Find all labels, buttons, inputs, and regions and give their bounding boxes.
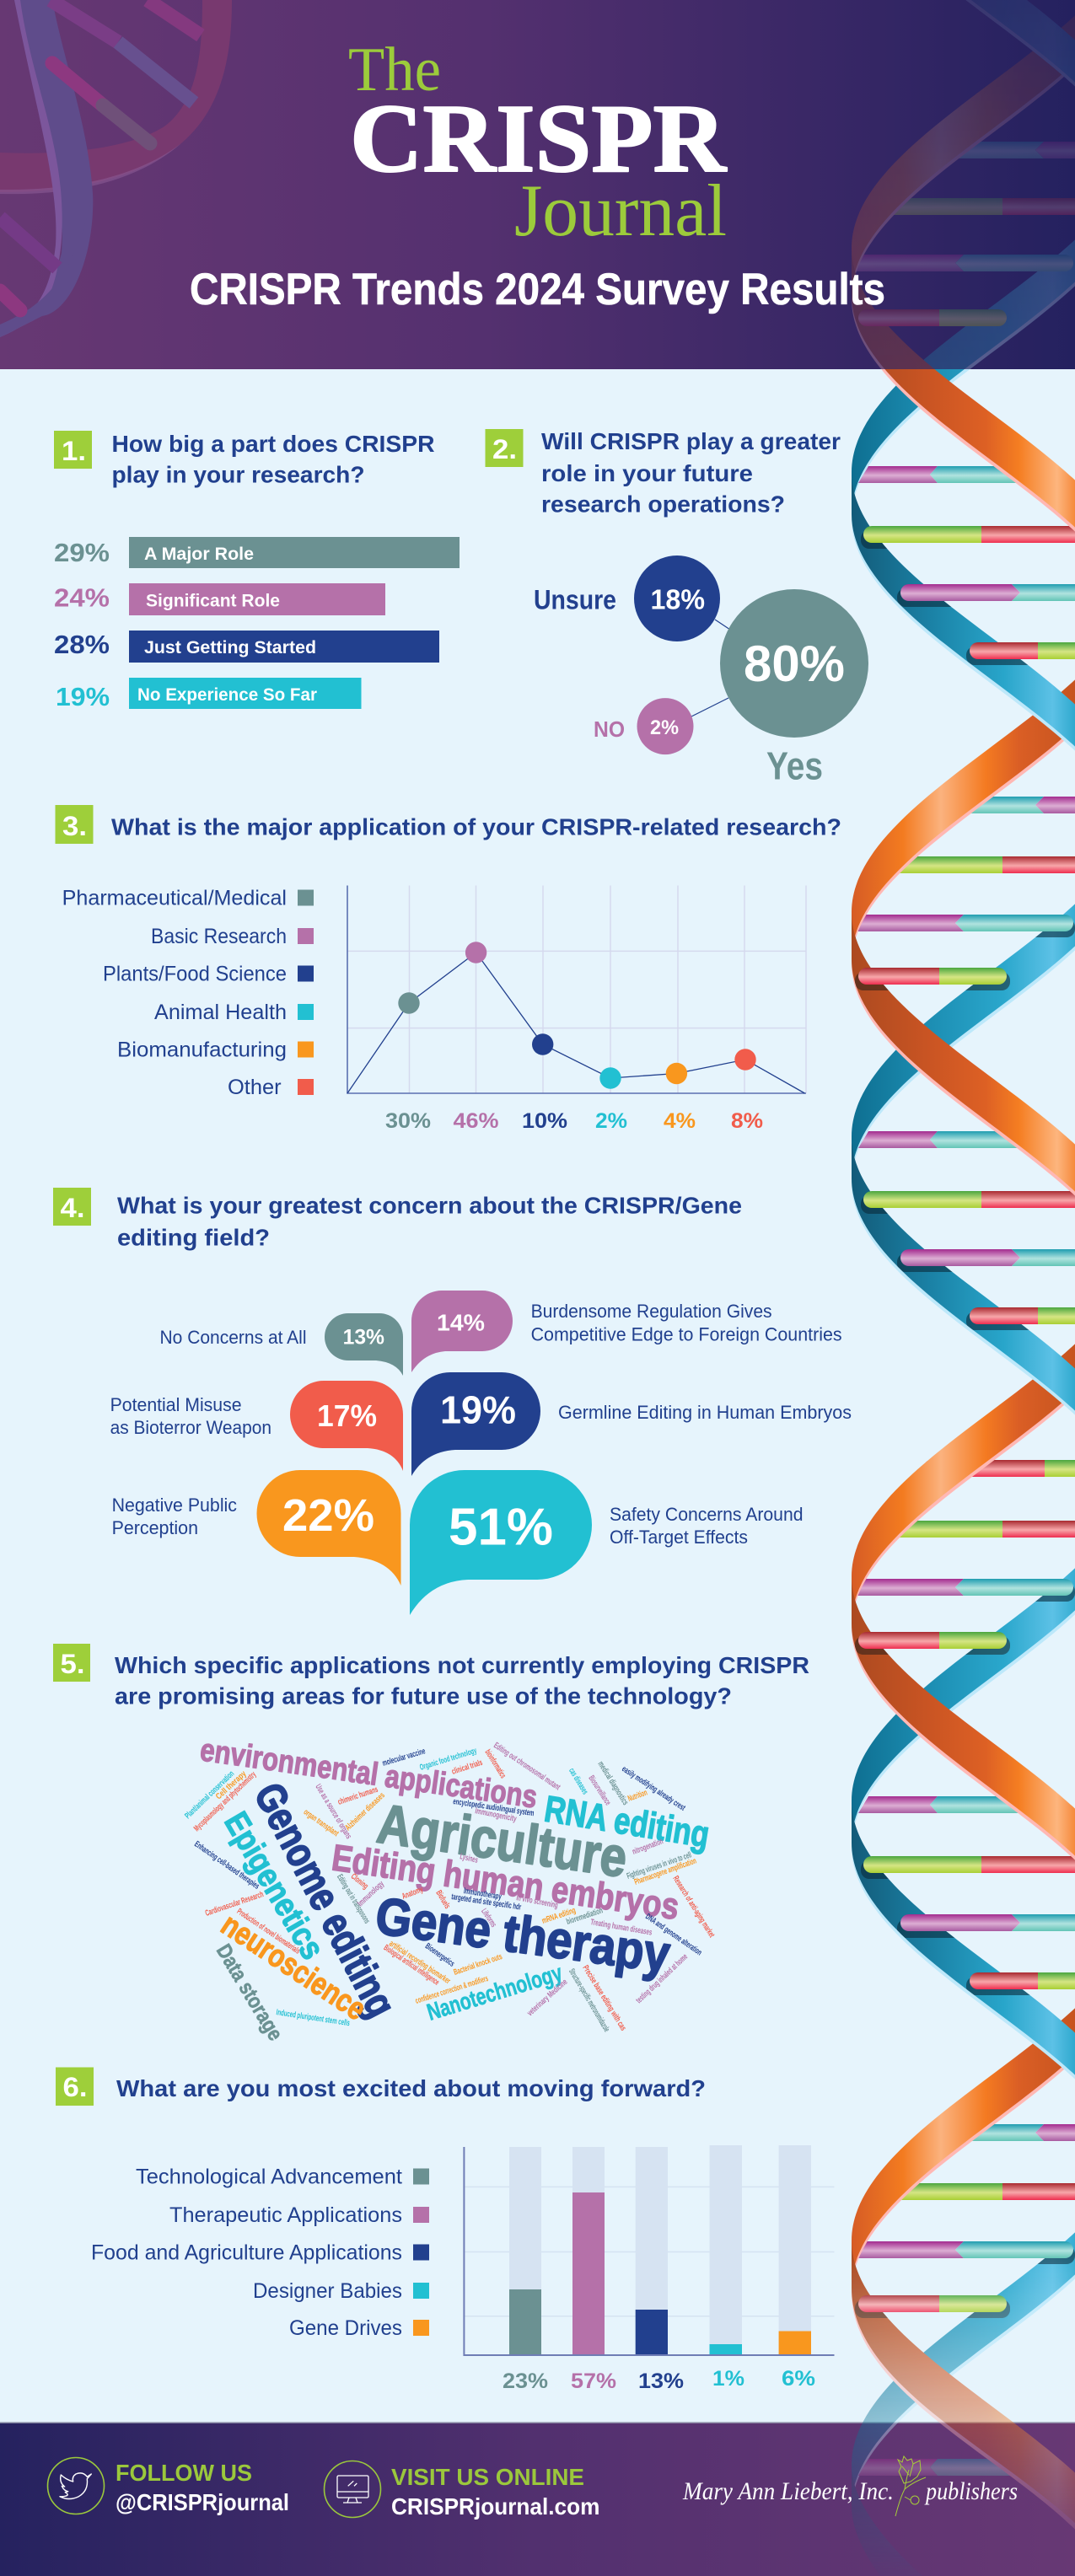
speech bubble: 14%: Competitive Edge to Foreign Countries <box>531 1324 842 1345</box>
question 1 heading: play in your research? <box>111 462 364 487</box>
bar: a major role <box>54 537 460 568</box>
stacked bar chart: 23% <box>503 2369 548 2393</box>
word: Nanotechnology: Nanotechnology <box>424 1959 566 2026</box>
small words: Plant/animal conservation <box>183 1769 236 1821</box>
rungs behind orange strand <box>850 142 1075 2264</box>
small words: artificial recording biomarker <box>387 1939 452 1986</box>
bar: no experience so far: No Experience So Far <box>137 685 317 705</box>
small words: Editing out chromosomal mutant <box>492 1741 562 1792</box>
small words: Fighting viruses in vivo to cell <box>626 1850 693 1881</box>
badge 4 <box>53 1188 91 1226</box>
legend: Food and Agriculture Applications <box>91 2241 402 2264</box>
journal logo <box>348 35 727 252</box>
bubble: yes 80% <box>720 589 868 788</box>
small words: chimeric humans <box>336 1785 379 1807</box>
follow us text <box>116 2460 289 2515</box>
small words: DNA and genome alteration <box>643 1912 703 1957</box>
speech bubble: 17% <box>110 1381 403 1471</box>
bubble: no 2% <box>594 698 693 754</box>
logo: The: The <box>348 35 441 105</box>
legend: Technological Advancement <box>136 2165 402 2188</box>
visit us text: VISIT US ONLINE <box>391 2464 584 2490</box>
visit us text <box>391 2464 599 2520</box>
speech bubble: 13%: No Concerns at All <box>160 1327 307 1348</box>
speech bubble: 14%: 14% <box>437 1310 485 1335</box>
question 1 heading <box>111 431 435 487</box>
small words: confidence correction & modifiers <box>414 1974 490 2006</box>
DNA double helix <box>850 0 1075 2576</box>
stacked bar chart: 1% <box>712 2367 744 2391</box>
bubble: yes 80%: Yes <box>766 744 823 788</box>
small words: Precise base editing with cas <box>580 1964 628 2033</box>
legend <box>91 2165 429 2340</box>
orange strand, descending segments <box>852 0 1075 2292</box>
speech bubble: 51%: Safety Concerns Around <box>610 1504 803 1525</box>
logo: CRISPR: CRISPR <box>350 85 727 193</box>
word: Agriculture: Agriculture <box>374 1792 631 1889</box>
small words: encyclopedic audiolingual system <box>453 1797 535 1818</box>
small words: Production of novel biomaterials <box>235 1907 302 1956</box>
small words: molecular vaccine <box>381 1747 427 1768</box>
small words: Treating human diseases <box>589 1918 653 1938</box>
small words: testing drug inhaled at home <box>634 1952 690 2005</box>
legend: Gene Drives <box>289 2316 402 2340</box>
bubble: unsure 18%: 18% <box>651 584 705 615</box>
legend: Plants/Food Science <box>103 963 287 986</box>
small words: Immunogenicity <box>474 1806 518 1824</box>
badge 6 <box>56 2067 94 2106</box>
word: Genome editing: Genome editing <box>245 1775 406 2025</box>
footer content <box>47 2456 1018 2520</box>
bubble: yes 80%: 80% <box>744 636 845 692</box>
speech bubble: 13%: 13% <box>343 1325 384 1349</box>
speech bubble: 51%: Off-Target Effects <box>610 1527 748 1548</box>
small words: nitrogenation <box>632 1837 664 1857</box>
speech bubble: 17%: as Bioterror Weapon <box>110 1417 271 1438</box>
rungs over blue strand <box>858 466 1075 2476</box>
stacked bar chart: 57% <box>571 2369 616 2393</box>
small words: clinical trials <box>451 1758 484 1777</box>
word: RNA editing: RNA editing <box>541 1789 712 1856</box>
line chart: 46% <box>454 1109 499 1133</box>
bar: a major role: 29% <box>54 538 110 567</box>
panel: question 4 <box>53 1188 852 1615</box>
stacked bar chart: 6% <box>782 2367 815 2391</box>
panel: question 5 <box>53 1644 809 2045</box>
logo: Journal: Journal <box>514 170 727 252</box>
small words: Cell therapy <box>214 1769 249 1801</box>
small words: Biosurveillance <box>586 1774 612 1807</box>
bar: significant role: Significant Role <box>146 592 280 610</box>
badge 6: 6. <box>62 2072 88 2102</box>
small words: Pharmacogene amplification <box>633 1856 697 1887</box>
word: Editing human embryos: Editing human embryos <box>330 1837 681 1928</box>
bar: a major role: A Major Role <box>144 545 254 564</box>
panel: question 3 <box>56 805 841 1133</box>
question 6 heading: What are you most excited about moving forward? <box>116 2075 706 2101</box>
word: environmental applications: environmental applications <box>198 1732 540 1816</box>
small words: Organic food technology <box>419 1747 478 1773</box>
orange strand, ascending segments <box>852 248 1075 2576</box>
follow us text: @CRISPRjournal <box>116 2489 289 2515</box>
legend: Biomanufacturing <box>117 1038 287 1062</box>
small words: In vivo screening <box>515 1893 559 1910</box>
question 4 heading: editing field? <box>117 1224 270 1251</box>
rungs over orange strand <box>855 309 1010 2318</box>
legend: Animal Health <box>154 1001 287 1024</box>
speech bubble: 22% <box>112 1470 401 1586</box>
legend <box>62 887 314 1099</box>
badge 2: 2. <box>492 434 517 464</box>
small words: easily modifying already crest <box>620 1764 687 1813</box>
line chart <box>347 885 806 1133</box>
small words: mRNA editing <box>540 1906 577 1926</box>
badge 3: 3. <box>62 811 87 841</box>
small words: bioremediation <box>565 1906 604 1927</box>
speech bubble: 14%: Burdensome Regulation Gives <box>531 1301 772 1322</box>
badge 1 <box>54 431 92 469</box>
word: Gene therapy: Gene therapy <box>373 1886 674 1984</box>
badge 1: 1. <box>62 436 86 466</box>
small words: Lifeforms <box>479 1908 498 1929</box>
small words: Editing out in transposons <box>335 1873 372 1925</box>
bubble: no 2%: 2% <box>650 716 679 739</box>
question 4 heading <box>117 1192 742 1251</box>
question 2 heading: Will CRISPR play a greater <box>541 428 841 454</box>
legend: Designer Babies <box>253 2279 402 2303</box>
bar: significant role: 24% <box>54 583 110 612</box>
line chart: 10% <box>522 1109 567 1133</box>
small words: bioinformatics <box>482 1748 508 1780</box>
small words: Induced pluripotent stem cells <box>276 2008 351 2028</box>
badge 2 <box>486 429 523 467</box>
line chart: 4% <box>664 1109 696 1133</box>
panel: question 6 <box>56 2067 835 2393</box>
visit us text: CRISPRjournal.com <box>391 2493 599 2520</box>
title: CRISPR Trends 2024 Survey Results <box>190 265 885 314</box>
blue strand, front segments <box>852 0 1075 2576</box>
speech bubble: 19% <box>411 1372 852 1476</box>
speech bubble: 51%: 51% <box>449 1499 553 1557</box>
speech bubble: 14% <box>411 1291 842 1372</box>
word: Epigenetics: Epigenetics <box>217 1806 331 1966</box>
bubble: unsure 18% <box>534 555 720 641</box>
panel: question 1 <box>54 431 460 711</box>
faded DNA at header left <box>0 0 232 337</box>
small words: Biofuels <box>433 1889 452 1911</box>
small words: Cloning <box>349 1872 370 1892</box>
icon: twitter bird <box>47 2458 105 2514</box>
small words: Nutrition <box>626 1788 648 1804</box>
blue strand, rear segments <box>852 140 1075 2511</box>
bar: no experience so far: 19% <box>56 682 110 711</box>
speech bubble: 22%: Negative Public <box>112 1495 237 1516</box>
header band <box>0 0 1075 369</box>
line chart: 30% <box>385 1109 431 1133</box>
bar: just getting started <box>54 630 439 663</box>
small words: Anatomy <box>400 1885 425 1902</box>
question 3 heading: What is the major application of your CRISPR-related research? <box>111 814 841 840</box>
question 5 heading: are promising areas for future use of the technology? <box>115 1683 732 1709</box>
question 2 heading <box>541 428 841 518</box>
speech bubble: 17%: Potential Misuse <box>110 1394 242 1415</box>
speech bubble: 17%: 17% <box>317 1398 377 1433</box>
word: Data storage: Data storage <box>212 1940 288 2045</box>
small words: veterinary Medicine <box>525 1978 570 2018</box>
legend: Other <box>228 1076 282 1099</box>
footer band <box>0 2423 1075 2576</box>
legend: Pharmaceutical/Medical <box>62 887 287 910</box>
small words: Use as a source of organs <box>313 1783 353 1841</box>
stacked bar chart <box>464 2145 835 2393</box>
question 5 heading <box>115 1652 809 1709</box>
question 2 heading: role in your future <box>541 460 753 486</box>
bubble: unsure 18%: Unsure <box>534 585 616 615</box>
small words: Lysines <box>459 1852 479 1865</box>
small words: Bacterial knock outs <box>453 1952 503 1978</box>
question 1 heading: How big a part does CRISPR <box>111 431 435 457</box>
small words: Enhancing cell-based therapies <box>192 1839 261 1892</box>
icon: monitor <box>324 2461 381 2517</box>
word cloud <box>183 1732 717 2045</box>
bar: just getting started: 28% <box>54 630 110 659</box>
badge 3 <box>56 805 93 844</box>
question 4 heading: What is your greatest concern about the CRISPR/Gene <box>117 1192 742 1219</box>
speech bubble: 19%: 19% <box>440 1388 516 1432</box>
small words: cas diseases <box>567 1767 589 1796</box>
small words: targeted and site specific hdr <box>451 1892 522 1913</box>
icon: flower sprig <box>895 2456 926 2516</box>
bar: significant role <box>54 583 385 615</box>
speech bubble: 22%: 22% <box>282 1490 374 1541</box>
legend: Therapeutic Applications <box>169 2203 402 2227</box>
small words: Immunotherapy <box>463 1886 503 1902</box>
question 5 heading: Which specific applications not currently employing CRISPR <box>115 1652 809 1678</box>
bar: just getting started: Just Getting Started <box>144 638 316 657</box>
bubble connectors <box>691 620 730 716</box>
badge 4: 4. <box>61 1193 84 1223</box>
publisher logo: Mary Ann Liebert, Inc. <box>682 2477 894 2505</box>
follow us text: FOLLOW US <box>116 2460 252 2486</box>
line chart: 2% <box>595 1109 627 1133</box>
publisher logo <box>682 2456 1018 2516</box>
stacked bar chart: 13% <box>638 2369 684 2393</box>
small words: Research of anti-aging market <box>670 1875 717 1940</box>
small words: medical diagnostics <box>595 1760 630 1807</box>
small words: Structure-specific metronomidazole <box>567 1967 611 2034</box>
small words: Mycoplasmology and phytochemistry <box>192 1770 258 1833</box>
bar: no experience so far <box>56 678 361 711</box>
small words: Biological artificial intelligence <box>382 1943 441 1988</box>
small words: Alzheimer diseases <box>343 1790 387 1833</box>
speech bubble: 13% <box>160 1313 403 1376</box>
small words: Bioenergetics <box>423 1941 456 1969</box>
speech bubble: 51% <box>410 1470 803 1615</box>
small words: Immunology <box>356 1879 386 1908</box>
badge 5 <box>53 1644 90 1682</box>
legend: Basic Research <box>151 925 287 948</box>
small words: Cardiovascular Research <box>204 1890 265 1919</box>
word: neuroscience: neuroscience <box>215 1907 372 2027</box>
bubble: no 2%: NO <box>594 716 625 742</box>
small words: organ transplant <box>302 1807 341 1838</box>
speech bubble: 22%: Perception <box>112 1517 198 1538</box>
question 2 heading: research operations? <box>541 491 785 518</box>
badge 5: 5. <box>61 1649 84 1679</box>
speech bubble: 19%: Germline Editing in Human Embryos <box>558 1402 852 1423</box>
publisher logo: publishers <box>924 2477 1018 2505</box>
line chart: 8% <box>731 1109 763 1133</box>
panel: question 2 <box>486 428 868 788</box>
small words <box>183 1741 717 2034</box>
